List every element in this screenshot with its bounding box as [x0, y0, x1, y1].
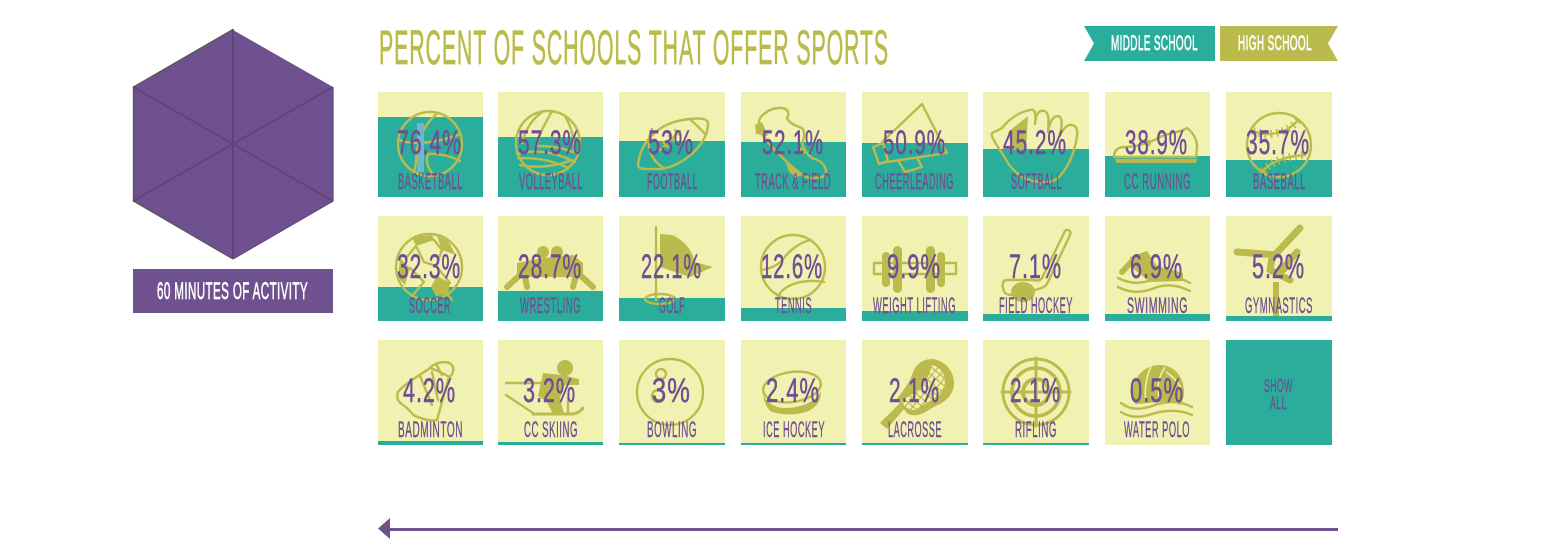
tile: cc running: [1105, 92, 1210, 197]
tile: swimming: [1105, 216, 1210, 321]
tile: basketball: BASKETBALL: [398, 169, 463, 194]
value: 28.7%: [518, 248, 582, 286]
tile: wrestling: [498, 216, 603, 321]
icon: golf flag: [645, 227, 713, 304]
value: 0.5%: [1130, 372, 1184, 410]
icon: tennis ball: [761, 235, 825, 299]
text: CHEERLEADING: [875, 169, 954, 194]
tile: field hockey: FIELD HOCKEY: [999, 293, 1073, 318]
icon: swimmer: [1118, 251, 1190, 292]
value: 53%: [648, 124, 694, 162]
value: 3%: [652, 372, 691, 410]
icon: skier: [506, 360, 583, 414]
tile: badminton: BADMINTON: [398, 417, 463, 442]
value: 45.2%: [1003, 124, 1067, 162]
activity label: [133, 269, 333, 313]
value: 38.9%: [1125, 124, 1188, 162]
legend: middle school: [1084, 26, 1215, 61]
value: 2.1%: [1010, 372, 1061, 410]
tile: bowling: [619, 340, 725, 445]
icon: gymnast: [1237, 228, 1300, 316]
tile: ice hockey: [741, 340, 846, 445]
value: 7.1%: [1009, 248, 1062, 286]
icon: volleyball: [516, 111, 580, 175]
value: 5.2%: [1252, 248, 1305, 286]
value: 4.2%: [403, 372, 456, 410]
tile: soccer: SOCCER: [409, 293, 451, 318]
tile: track and field: [741, 92, 846, 197]
tile: volleyball: [498, 92, 603, 197]
icon: megaphone: [873, 104, 947, 172]
tile: track and field: TRACK & FIELD: [755, 169, 831, 194]
tile: cc skiing: [498, 340, 603, 445]
activity label: 60 MINUTES OF ACTIVITY: [157, 278, 308, 305]
value: 12.6%: [761, 248, 823, 286]
tile: volleyball: VOLLEYBALL: [519, 169, 583, 194]
tile: softball: SOFTBALL: [1011, 169, 1062, 194]
button: show all: SHOW: [1264, 376, 1293, 396]
tile: football: [619, 92, 725, 197]
tile: gymnastics: [1226, 216, 1332, 321]
tile: lacrosse: LACROSSE: [888, 417, 942, 442]
icon: football: [638, 119, 708, 169]
tile: ice hockey: ICE HOCKEY: [763, 417, 825, 442]
tile: water polo: [1105, 340, 1210, 445]
icon: basketball: [398, 112, 462, 176]
value: 2.1%: [889, 372, 940, 410]
arrow: left: [378, 518, 1338, 539]
tile: gymnastics: GYMNASTICS: [1245, 293, 1313, 318]
button: show all: ALL: [1270, 393, 1287, 413]
button: show all: [1226, 340, 1332, 445]
value: 50.9%: [883, 124, 946, 162]
value: 6.9%: [1130, 248, 1183, 286]
value: 32.3%: [397, 248, 461, 286]
icon: barbell: [874, 246, 956, 293]
value: 2.4%: [766, 372, 820, 410]
legend: high school: [1220, 26, 1338, 61]
text: PERCENT OF SCHOOLS THAT OFFER SPORTS: [379, 22, 889, 75]
hexagon: 60 minutes of activity: [133, 29, 333, 259]
icon: lacrosse stick: [880, 359, 954, 429]
tile: soccer: [378, 216, 483, 321]
tile: tennis: TENNIS: [775, 293, 812, 318]
icon: target: [1002, 358, 1070, 426]
value: 52.1%: [762, 124, 824, 162]
tile: lacrosse: [862, 340, 968, 445]
tile: rifling: [983, 340, 1089, 445]
tile: cc skiing: CC SKIING: [524, 417, 578, 442]
tile: cheerleading: [862, 92, 968, 197]
tile: weight lifting: [862, 216, 968, 321]
icon: wrestlers: [507, 246, 593, 287]
tile: baseball: [1226, 92, 1332, 197]
icon: hockey stick: [1003, 230, 1070, 302]
value: 22.1%: [641, 248, 702, 286]
icon: shuttlecock: [397, 362, 453, 421]
value: 76.4%: [397, 124, 462, 162]
icon: running shoe: [1114, 128, 1197, 163]
tile: basketball: [378, 92, 483, 197]
legend: middle school: MIDDLE SCHOOL: [1111, 32, 1198, 55]
tile: field hockey: [983, 216, 1089, 321]
icon: track shoe: [755, 108, 826, 178]
tile: cc running: CC RUNNING: [1124, 169, 1191, 194]
icon: puck: [761, 368, 823, 414]
icon: soccer ball: [396, 234, 462, 300]
icon: ball in water: [1121, 365, 1192, 417]
legend: high school: HIGH SCHOOL: [1238, 32, 1312, 55]
tile: swimming: SWIMMING: [1127, 293, 1188, 318]
tile: golf: [619, 216, 725, 321]
tile: golf: GOLF: [659, 293, 685, 318]
value: 3.2%: [523, 372, 576, 410]
tile: tennis: [741, 216, 846, 321]
tile: football: FOOTBALL: [647, 169, 698, 194]
tile: water polo: WATER POLO: [1124, 417, 1190, 442]
tile: softball: [983, 92, 1089, 197]
tile: wrestling: WRESTLING: [520, 293, 581, 318]
value: 9.9%: [887, 248, 941, 286]
icon: bowling ball and pin: [637, 359, 703, 425]
tile: bowling: BOWLING: [647, 417, 697, 442]
tile: badminton: [378, 340, 483, 445]
text: WEIGHT LIFTING: [873, 293, 956, 318]
icon: glove: [992, 110, 1077, 182]
tile: rifling: RIFLING: [1015, 417, 1057, 442]
value: 35.7%: [1246, 124, 1310, 162]
value: 57.3%: [518, 124, 582, 162]
icon: baseball: [1247, 113, 1311, 177]
tile: baseball: BASEBALL: [1253, 169, 1306, 194]
